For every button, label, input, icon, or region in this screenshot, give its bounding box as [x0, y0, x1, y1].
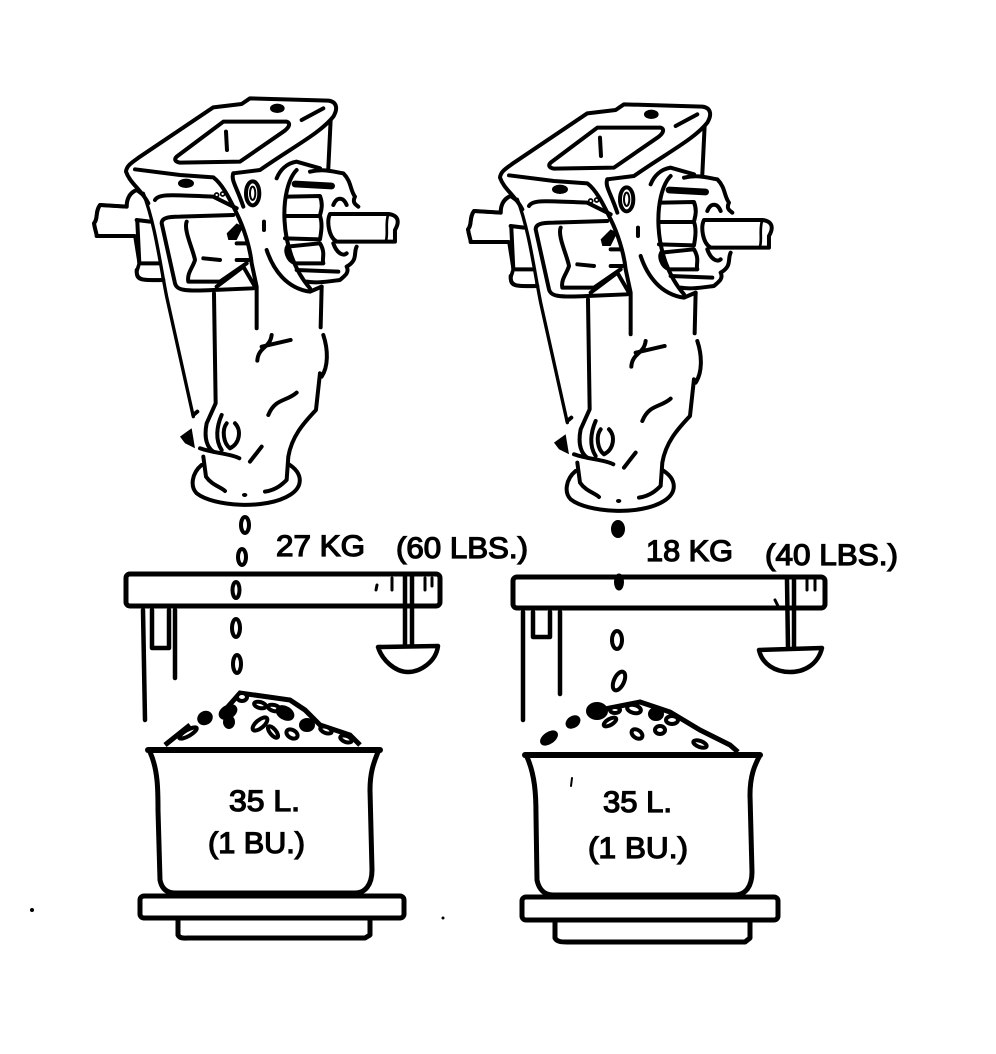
bucket label, left: 35 L.: [229, 785, 300, 818]
illustration: seed metering unit, left: [94, 98, 398, 505]
scale, left: [126, 574, 440, 720]
bucket label, right: (1 BU.): [588, 832, 688, 865]
bucket, left: [140, 750, 404, 938]
weight label, left: (60 LBS.): [396, 532, 528, 565]
weight label, right: (40 LBS.): [765, 539, 898, 572]
bucket label, right: [588, 786, 688, 865]
bucket label, left: [208, 785, 305, 860]
bucket, right: [522, 755, 778, 942]
bucket label, right: 35 L.: [603, 786, 672, 819]
seed heap, right: [540, 700, 740, 752]
falling seeds, left: [232, 517, 249, 673]
scale, right: [513, 575, 825, 720]
weight label, right: [646, 535, 898, 572]
bucket label, left: (1 BU.): [208, 827, 305, 860]
weight label, left: 27 KG: [276, 530, 365, 563]
falling seeds, right: [610, 522, 628, 692]
panel: light seed sample (right): [468, 104, 898, 942]
seed heap, left: [162, 693, 372, 750]
panel: heavy seed sample (left): [94, 98, 528, 938]
illustration: seed metering unit, right: [468, 104, 772, 511]
weight label, left: [276, 530, 528, 565]
weight label, right: 18 KG: [646, 535, 733, 568]
